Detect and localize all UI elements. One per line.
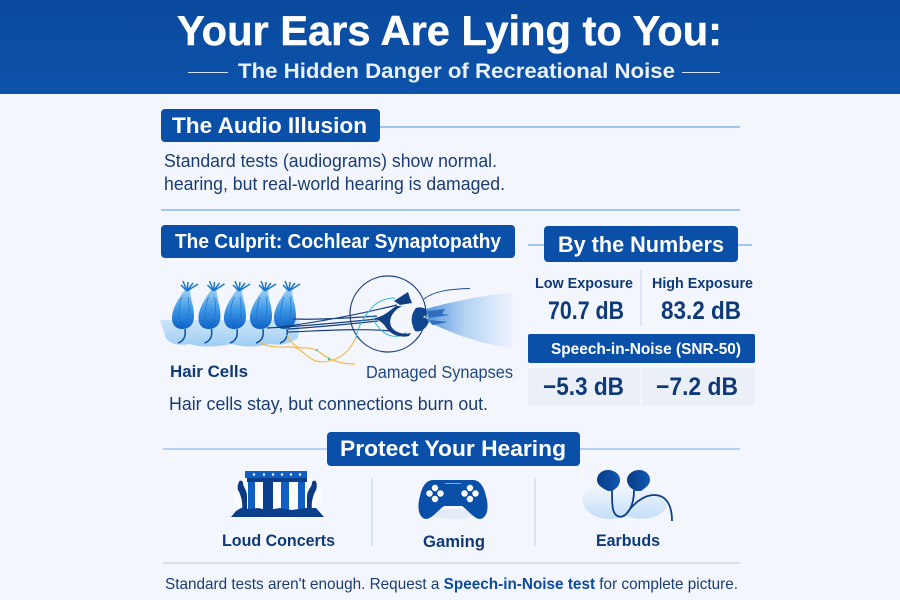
heading: by the numbers bbox=[544, 226, 738, 262]
stat: high exposure bbox=[652, 276, 753, 325]
label: gaming: Gaming bbox=[423, 532, 485, 551]
bar: speech-in-noise bbox=[528, 334, 755, 363]
heading: the culprit bbox=[161, 225, 515, 258]
stat: low exposure: Low Exposure bbox=[535, 276, 633, 292]
icon: concert stage bbox=[231, 470, 324, 520]
label: loud concerts: Loud Concerts bbox=[222, 532, 335, 550]
tissue base bbox=[160, 320, 300, 346]
body text: hearing, but real-world hearing is damaged. bbox=[164, 173, 505, 194]
nerve fan bbox=[426, 292, 513, 348]
stat: high exposure snr bbox=[642, 368, 755, 405]
diagram: hair cells and synapses bbox=[160, 276, 513, 364]
heading: the audio illusion: The Audio Illusion bbox=[172, 113, 367, 138]
heading: the audio illusion bbox=[161, 109, 380, 142]
icon: hair cells bbox=[172, 281, 300, 343]
title: Your Ears Are Lying to You: bbox=[177, 7, 722, 54]
stat: low exposure snr: −5.3 dB bbox=[543, 373, 624, 401]
nerve fibres bbox=[267, 305, 397, 332]
icon: gamepad bbox=[418, 480, 488, 519]
circle inset bbox=[350, 276, 426, 352]
icon: earbuds bbox=[583, 470, 672, 521]
damaged yellow fibres bbox=[260, 335, 356, 364]
label: earbuds: Earbuds bbox=[596, 532, 660, 550]
stat: low exposure: 70.7 dB bbox=[548, 297, 624, 325]
panel: protect your hearing bbox=[163, 432, 740, 551]
heading: protect your hearing: Protect Your Hearing bbox=[340, 436, 566, 461]
stat: low exposure snr bbox=[528, 368, 640, 405]
label: damaged synapses: Damaged Synapses bbox=[366, 362, 513, 382]
label: hair cells: Hair Cells bbox=[170, 363, 248, 381]
stat: high exposure snr: −7.2 dB bbox=[656, 373, 738, 401]
heading: by the numbers: By the Numbers bbox=[558, 232, 724, 257]
terminal bbox=[412, 307, 429, 331]
panel: the culprit bbox=[160, 225, 515, 414]
panel: by the numbers bbox=[528, 226, 755, 405]
footer note: Standard tests aren't enough. Request a Speech-in-Noise test for complete picture. bbox=[165, 576, 738, 593]
subtitle: The Hidden Danger of Recreational Noise bbox=[238, 59, 675, 83]
stat: low exposure bbox=[535, 276, 633, 325]
panel: the audio illusion bbox=[161, 109, 740, 194]
stat: high exposure: 83.2 dB bbox=[661, 297, 741, 325]
synapse bbox=[374, 306, 411, 337]
bar: speech-in-noise: Speech-in-Noise (SNR-50) bbox=[551, 341, 741, 358]
header banner bbox=[0, 0, 900, 94]
heading: the culprit: The Culprit: Cochlear Synaptopathy bbox=[175, 230, 502, 253]
caption: Hair cells stay, but connections burn out. bbox=[169, 394, 488, 414]
stat: high exposure: High Exposure bbox=[652, 276, 753, 292]
heading: protect your hearing bbox=[327, 432, 580, 466]
body text: Standard tests (audiograms) show normal. bbox=[164, 150, 497, 171]
body text bbox=[164, 150, 505, 194]
